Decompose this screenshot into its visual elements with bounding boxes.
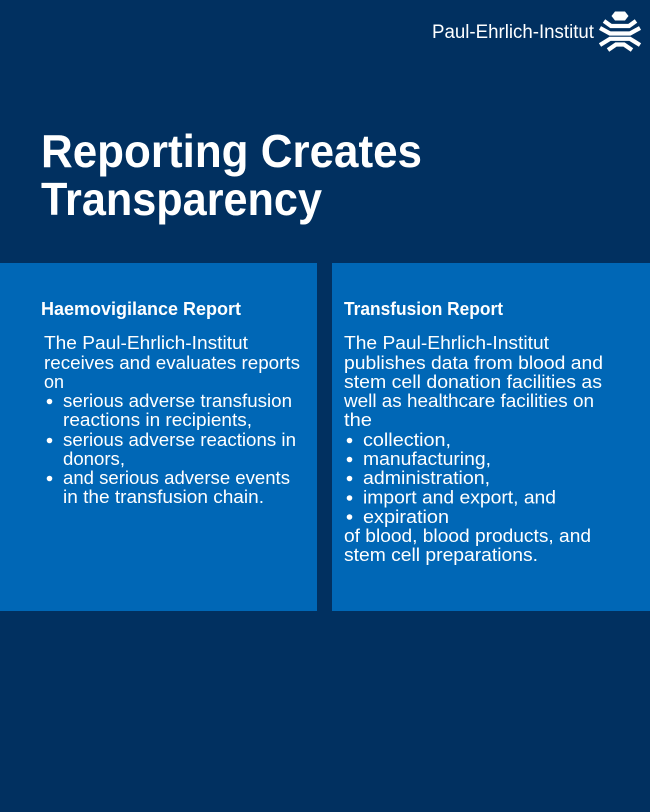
text block: haemovigilance description: reactions in recipients, bbox=[63, 409, 252, 430]
text block: transfusion description: stem cell preparations. bbox=[344, 544, 538, 565]
heading: Haemovigilance Report: Haemovigilance Report bbox=[41, 299, 241, 319]
icon: Paul-Ehrlich-Institut logo mark bbox=[600, 12, 640, 50]
title bbox=[41, 125, 422, 225]
text block: haemovigilance description: in the transfusion chain. bbox=[63, 486, 264, 507]
text block: transfusion description: publishes data from blood and bbox=[344, 352, 603, 373]
heading: Transfusion Report: Transfusion Report bbox=[344, 299, 503, 319]
text block: haemovigilance description: The Paul-Ehrlich-Institut bbox=[44, 332, 248, 353]
panel: Haemovigilance Report bbox=[0, 263, 317, 611]
text block: haemovigilance description: receives and evaluates reports bbox=[44, 352, 300, 373]
text block: haemovigilance description: on bbox=[44, 371, 64, 392]
text block: transfusion description: collection, bbox=[363, 429, 451, 450]
text block: transfusion description: manufacturing, bbox=[363, 448, 491, 469]
text block: transfusion description bbox=[343, 332, 603, 565]
text block: transfusion description: stem cell donation facilities as bbox=[344, 371, 602, 392]
text block: haemovigilance description: serious adverse reactions in bbox=[63, 429, 296, 450]
text block: transfusion description: expiration bbox=[363, 506, 449, 527]
text block: transfusion description: well as healthcare facilities on bbox=[343, 390, 594, 411]
text block: transfusion description: import and export, and bbox=[363, 486, 556, 508]
text block: haemovigilance description: serious adverse transfusion bbox=[63, 390, 292, 411]
text block: transfusion description: administration, bbox=[363, 467, 490, 488]
title: Reporting Creates bbox=[41, 125, 422, 177]
text block: haemovigilance description bbox=[44, 332, 300, 507]
text block: transfusion description: The Paul-Ehrlich-Institut bbox=[344, 332, 549, 353]
logo wordmark: Paul-Ehrlich-Institut bbox=[432, 22, 595, 43]
panel: Transfusion Report bbox=[332, 263, 650, 611]
title: Transparency bbox=[41, 173, 322, 225]
text block: transfusion description: of blood, blood products, and bbox=[344, 525, 591, 546]
text block: haemovigilance description: and serious adverse events bbox=[63, 467, 290, 488]
text block: transfusion description: the bbox=[344, 409, 372, 430]
text block: haemovigilance description: donors, bbox=[63, 448, 125, 469]
